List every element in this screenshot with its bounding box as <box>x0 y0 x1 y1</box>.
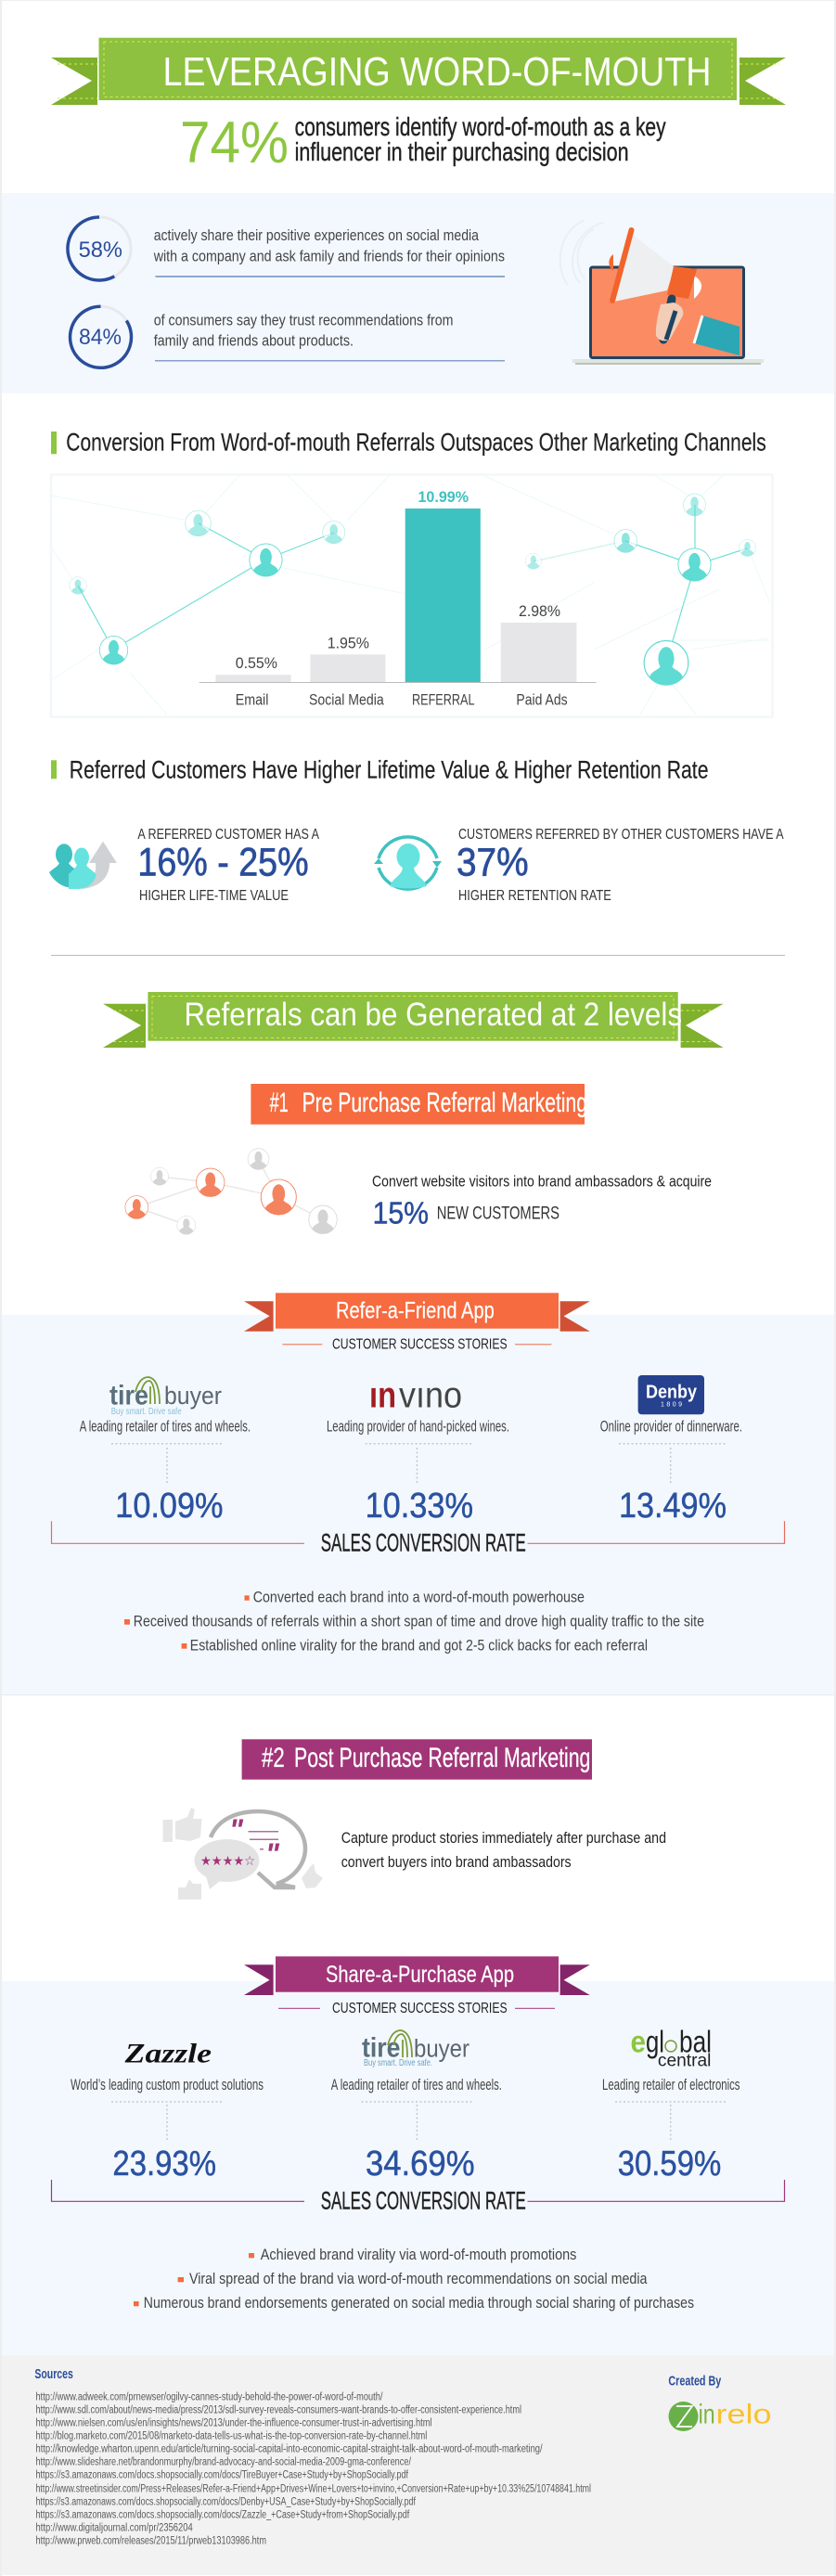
logo: invino <box>369 1376 462 1416</box>
sources list: http://knowledge.wharton.upenn.edu/article/turning-social-capital-into-economic-capital-straight-talk-about-word-of-mouth-marketing/ <box>35 2444 543 2455</box>
stat ring: 84%: 84% <box>79 325 122 350</box>
sources list: https://s3.amazonaws.com/docs.shopsocially.com/docs/TireBuyer+Case+Study+by+ShopSocially.pdf <box>35 2470 409 2481</box>
headline statistic: 74% <box>180 110 666 175</box>
stat: lifetime value: 16% - 25% <box>137 840 309 884</box>
chart panel: conversion by channel <box>51 475 772 716</box>
label: sales conversion rate: SALES CONVERSION RATE <box>321 2187 526 2215</box>
stat: retention: HIGHER RETENTION RATE <box>458 888 611 904</box>
bullet list: Converted each brand into a word-of-mouth powerhouse <box>253 1590 585 1606</box>
bar: Social Media: 1.95% <box>328 634 369 651</box>
text: trust recommendations: of consumers say they trust recommendations from <box>154 313 453 329</box>
ribbon: Share-a-Purchase App: Share-a-Purchase App <box>326 1962 514 1988</box>
icon: customers with growth arrow <box>49 842 117 889</box>
stat: lifetime value: A REFERRED CUSTOMER HAS A <box>137 827 320 843</box>
icon: review speech bubble: " <box>265 1837 280 1871</box>
logo: tirebuyer: Buy smart. Drive safe <box>111 1407 182 1417</box>
sources list: https://s3.amazonaws.com/docs.shopsocially.com/docs/Zazzle_+Case+Study+from+ShopSocially.pdf <box>35 2510 410 2521</box>
created by: Zinrelo: Created By <box>668 2374 722 2389</box>
text: actively share <box>153 227 505 277</box>
logo: invino: ın <box>369 1376 396 1416</box>
subheading: customer success stories: CUSTOMER SUCCESS STORIES <box>332 2001 508 2016</box>
text: convert visitors: Convert website visitors into brand ambassadors & acquire <box>372 1173 712 1190</box>
headline statistic: 74%: influencer in their purchasing decision <box>295 137 629 166</box>
bullet list: Received thousands of referrals within a short span of time and drove high quality traffic to the site <box>134 1614 704 1630</box>
logo: tirebuyer: buyer <box>414 2035 469 2063</box>
headline statistic: 74%: 74% <box>180 110 289 175</box>
logo: tirebuyer: buyer <box>164 1382 222 1410</box>
bullet list: Viral spread of the brand via word-of-mouth recommendations on social media <box>189 2271 648 2287</box>
stat: lifetime value: HIGHER LIFE-TIME VALUE <box>139 888 289 904</box>
logo: eglobal central: central <box>658 2052 711 2071</box>
sources list: http://www.digitaljournal.com/pr/2356204 <box>35 2523 193 2534</box>
bar: Referral: 10.99% <box>418 488 469 506</box>
icon: referral network <box>125 1149 337 1234</box>
icon: retention cycle <box>374 837 442 889</box>
descriptions: Leading retailer of electronics <box>602 2077 740 2093</box>
stat: lifetime value <box>137 827 320 904</box>
bullet list <box>124 1590 704 1655</box>
label: sales conversion rate: SALES CONVERSION RATE <box>321 1529 526 1557</box>
descriptions: World’s leading custom product solutions <box>71 2077 264 2093</box>
sources list <box>34 2366 591 2547</box>
bar: Social Media <box>309 634 385 708</box>
stat ring: 58%: 58% <box>79 238 122 263</box>
descriptions <box>80 1419 742 1436</box>
stats: sales conversion <box>112 2145 721 2183</box>
logo: Denby: 1809 <box>661 1401 682 1408</box>
logo: tirebuyer: tire <box>362 2033 401 2064</box>
descriptions: A leading retailer of tires and wheels. <box>80 1419 251 1436</box>
created by: Zinrelo <box>668 2374 772 2431</box>
stats: sales conversion <box>115 1487 727 1526</box>
logo: Denby <box>638 1375 704 1414</box>
panel: refer-a-friend <box>2 1293 834 1695</box>
icon: review speech bubble: ★★★★☆ <box>200 1854 255 1869</box>
icon: review speech bubble <box>163 1808 323 1900</box>
logo: tirebuyer <box>109 1377 222 1417</box>
bar: Referral: REFERRAL <box>412 690 475 708</box>
stats: sales conversion: 30.59% <box>618 2145 721 2183</box>
people nodes <box>70 494 756 685</box>
descriptions: Leading provider of hand-picked wines. <box>327 1419 509 1436</box>
sources list: http://blog.marketo.com/2015/08/marketo-data-tells-us-what-is-the-top-conversion-rate-by-channel.html <box>35 2431 427 2442</box>
banner: referral levels <box>103 992 724 1048</box>
bar: Paid Ads: Paid Ads <box>516 690 568 708</box>
bullet list: Achieved brand virality via word-of-mouth promotions <box>261 2247 576 2263</box>
stat ring: 58% <box>68 217 131 280</box>
bar: Referral <box>405 488 481 708</box>
label: sales conversion rate <box>52 1521 785 1557</box>
stat: retention <box>457 827 784 904</box>
text: capture product stories: convert buyers into brand ambassadors <box>341 1854 572 1871</box>
text: trust recommendations: family and friends about products. <box>154 333 354 350</box>
logo: tirebuyer: Buy smart. Drive safe. <box>364 2058 432 2068</box>
label: sales conversion rate <box>52 2180 785 2215</box>
bullet list: Established online virality for the brand and got 2-5 click backs for each referral <box>190 1638 648 1655</box>
sources list: http://www.streetinsider.com/Press+Releases/Refer-a-Friend+App+Drives+Wine+Lovers+to+invino,+Conversion+Rate+up+by+10.33%25/10748841.html <box>35 2484 591 2495</box>
heading: post purchase: Post Purchase Referral Marketing <box>294 1743 590 1773</box>
descriptions: Online provider of dinnerware. <box>600 1419 742 1436</box>
stats: sales conversion: 10.33% <box>366 1487 473 1526</box>
ribbon: Refer-a-Friend App: Refer-a-Friend App <box>336 1298 495 1324</box>
stat: retention: 37% <box>457 840 529 884</box>
ribbon: Share-a-Purchase App <box>244 1956 590 1995</box>
bar: Email: Email <box>236 690 268 708</box>
text: convert visitors: 15% <box>373 1195 429 1230</box>
title: LEVERAGING WORD-OF-MOUTH <box>163 49 711 95</box>
sources list: http://www.prweb.com/releases/2015/11/prweb13103986.htm <box>35 2536 266 2547</box>
sources list: http://www.nielsen.com/us/en/insights/news/2013/under-the-influence-consumer-trust-in-advertising.html <box>35 2418 432 2429</box>
network background <box>51 475 770 715</box>
bar: Paid Ads: 2.98% <box>519 602 560 620</box>
text: actively share: actively share their positive experiences on social media <box>154 227 480 244</box>
heading: pre purchase <box>251 1084 587 1125</box>
stats: sales conversion: 23.93% <box>112 2145 216 2183</box>
heading: pre purchase: #1 <box>270 1088 289 1118</box>
heading: post purchase <box>242 1739 592 1780</box>
stats: sales conversion: 13.49% <box>619 1487 727 1526</box>
bullet list <box>134 2247 694 2312</box>
headline statistic: 74%: consumers identify word-of-mouth as a key <box>295 112 666 141</box>
logo: Denby: Denby <box>646 1383 698 1403</box>
panel: social sharing stats <box>2 193 834 393</box>
bar: Email <box>215 654 291 708</box>
logo: eglobal central: gl <box>646 2025 664 2059</box>
bullet list: Numerous brand endorsements generated on social media through social sharing of purchases <box>144 2295 694 2312</box>
logo: invino: vıno <box>399 1376 462 1416</box>
sources list: Sources <box>34 2366 73 2382</box>
created by: Zinrelo: relo <box>716 2400 772 2430</box>
logo: tirebuyer <box>362 2030 469 2068</box>
bar: Email: 0.55% <box>236 654 277 672</box>
heading: post purchase: #2 <box>262 1743 285 1773</box>
text: capture product stories: Capture product stories immediately after purchase and <box>341 1830 666 1847</box>
banner text: Referrals can be Generated at 2 levels <box>184 997 682 1033</box>
stat ring: 84% <box>71 306 132 367</box>
ribbon: Refer-a-Friend App <box>244 1293 590 1332</box>
sources list: http://www.slideshare.net/brandonmurphy/brand-advocacy-and-social-media-2009-gma-conference/ <box>35 2457 412 2468</box>
bar: Social Media: Social Media <box>309 690 384 708</box>
sources list: http://www.sdl.com/about/news-media/press/2013/sdl-survey-reveals-consumers-want-brands-to-offer-consistent-experience.html <box>35 2405 521 2416</box>
logo: eglobal central: e <box>631 2025 646 2059</box>
logo: eglobal central <box>631 2025 712 2071</box>
bar: Paid Ads <box>501 602 576 708</box>
logo: eglobal central: bal <box>679 2025 712 2059</box>
panel: share-a-purchase <box>2 1956 834 2355</box>
stats: sales conversion: 34.69% <box>366 2145 475 2183</box>
logo: tirebuyer: tire <box>109 1380 148 1410</box>
text: actively share: with a company and ask family and friends for their opinions <box>153 249 505 265</box>
text: convert visitors <box>372 1173 712 1230</box>
sources list: https://s3.amazonaws.com/docs.shopsocially.com/docs/Denby+USA_Case+Study+by+ShopSocially.pdf <box>35 2497 417 2508</box>
logo: Zazzle: Zazzle <box>123 2038 212 2068</box>
subheading: customer success stories: CUSTOMER SUCCESS STORIES <box>332 1337 508 1353</box>
text: capture product stories <box>341 1830 666 1871</box>
sources list: http://www.adweek.com/prnewser/ogilvy-cannes-study-behold-the-power-of-word-of-mouth/ <box>35 2392 383 2403</box>
icon: megaphone on laptop <box>560 220 764 365</box>
stats: sales conversion: 10.09% <box>115 1487 223 1526</box>
text: convert visitors: NEW CUSTOMERS <box>437 1204 559 1223</box>
title banner <box>51 38 786 105</box>
descriptions <box>71 2077 740 2093</box>
footer panel <box>2 2355 834 2575</box>
created by: Zinrelo: in <box>699 2400 715 2430</box>
descriptions: A leading retailer of tires and wheels. <box>331 2077 502 2093</box>
text: trust recommendations <box>154 313 505 362</box>
icon: review speech bubble: " <box>229 1813 244 1847</box>
